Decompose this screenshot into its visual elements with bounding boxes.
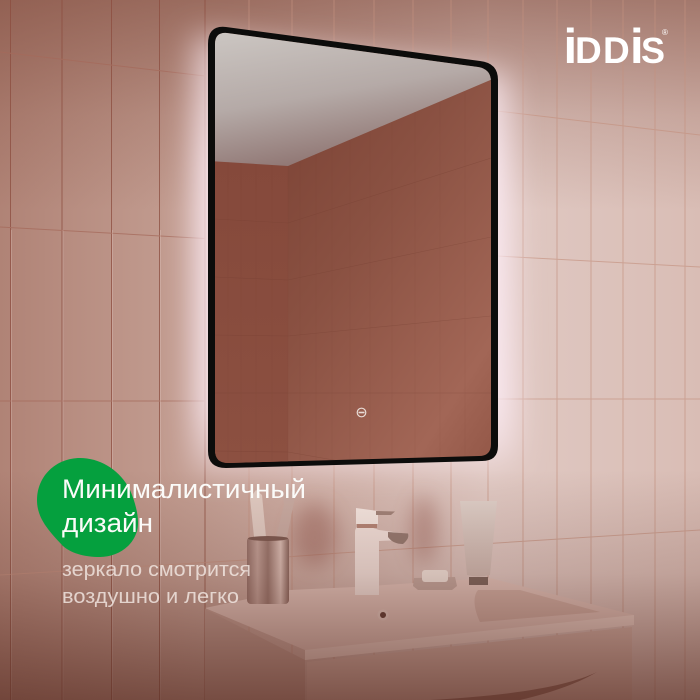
cabinet side [205,609,305,700]
vanity and sink [205,578,634,700]
cabinet front [307,627,632,700]
mirror reflection [210,28,495,470]
logo: D [603,30,630,71]
subheading: зеркало смотрится [62,558,251,581]
logo: i [630,20,644,74]
subheading [62,558,251,608]
toothbrush cup [247,536,289,604]
mirror frame [208,27,498,468]
sink front edge [305,615,634,660]
backlight glow around mirror [194,34,516,474]
logo: S [641,30,665,71]
cosmetic tube [460,501,497,585]
heading [62,474,306,538]
basin reflection [475,590,600,622]
soap dish [413,570,457,590]
logo: ® [662,28,668,37]
cabinet recess [430,672,597,700]
touch sensor icon [357,408,366,417]
toothbrushes [250,488,295,537]
sink top [205,578,634,660]
green blob [37,458,138,557]
heading: Минималистичный [62,474,306,504]
mirror [208,27,498,470]
heading: дизайн [62,508,153,538]
logo: D [575,30,602,71]
subheading: воздушно и легко [62,585,239,608]
overflow hole [378,610,388,620]
logo [564,20,668,74]
shadows behind fixtures [293,496,437,567]
logo: i [564,20,577,74]
faucet [355,508,409,595]
bottom darkening overlay [0,470,700,700]
